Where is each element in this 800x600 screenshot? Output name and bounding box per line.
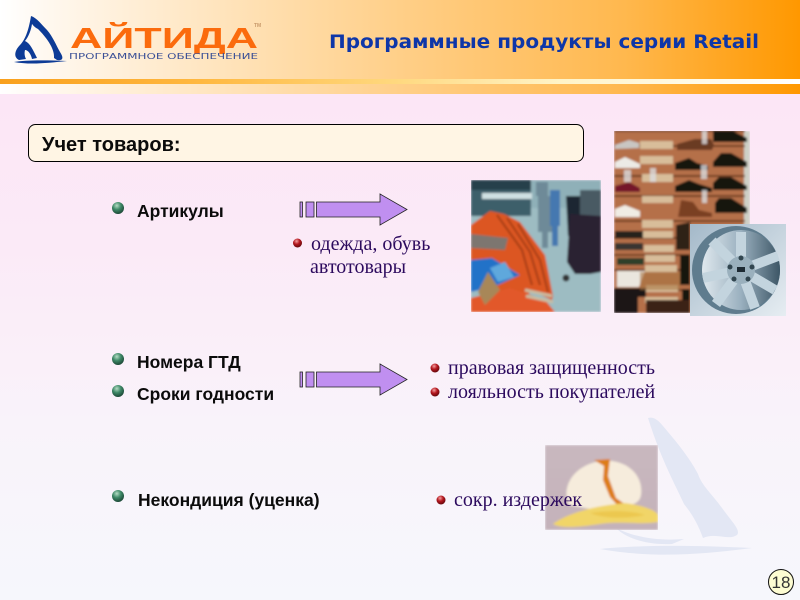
item: Сроки годности: Сроки годности [137, 384, 274, 404]
title: Программные продукты серии Retail [329, 32, 759, 53]
page number badge [768, 570, 794, 594]
photo: broken egg [545, 445, 658, 530]
item: Номера ГТД: Номера ГТД [137, 352, 241, 372]
logo subtitle: ПРОГРАММНОЕ ОБЕСПЕЧЕНИЕ [69, 52, 258, 61]
item: Артикулы: Артикулы [137, 201, 224, 221]
result: сокр. издержек: сокр. издержек [454, 489, 582, 511]
result: одежда, обувь / автотовары [293, 233, 430, 278]
trademark: TM [254, 23, 261, 29]
page number badge: 18 [772, 573, 790, 592]
item: Некондиция (уценка): Некондиция (уценка) [138, 490, 320, 510]
result: лояльность покупателей: лояльность покупателей [448, 381, 656, 403]
wordmark: АЙТИДА [70, 21, 258, 55]
result: одежда, обувь / автотовары: одежда, обувь [311, 233, 430, 255]
heading box: Учет товаров: [42, 134, 181, 156]
photo: shoe wall [614, 131, 750, 313]
watermark logo [600, 418, 752, 555]
arrow 1 [300, 194, 407, 225]
header band [0, 0, 800, 94]
icon: logo mountain [14, 16, 67, 64]
arrow 2 [300, 364, 407, 395]
photo: alloy wheel [690, 224, 786, 316]
heading box [28, 124, 584, 162]
result: одежда, обувь / автотовары: автотовары [310, 256, 406, 278]
photo: clothing rack [471, 180, 601, 312]
logo [14, 16, 261, 64]
result: правовая защищенность: правовая защищенность [448, 357, 655, 379]
